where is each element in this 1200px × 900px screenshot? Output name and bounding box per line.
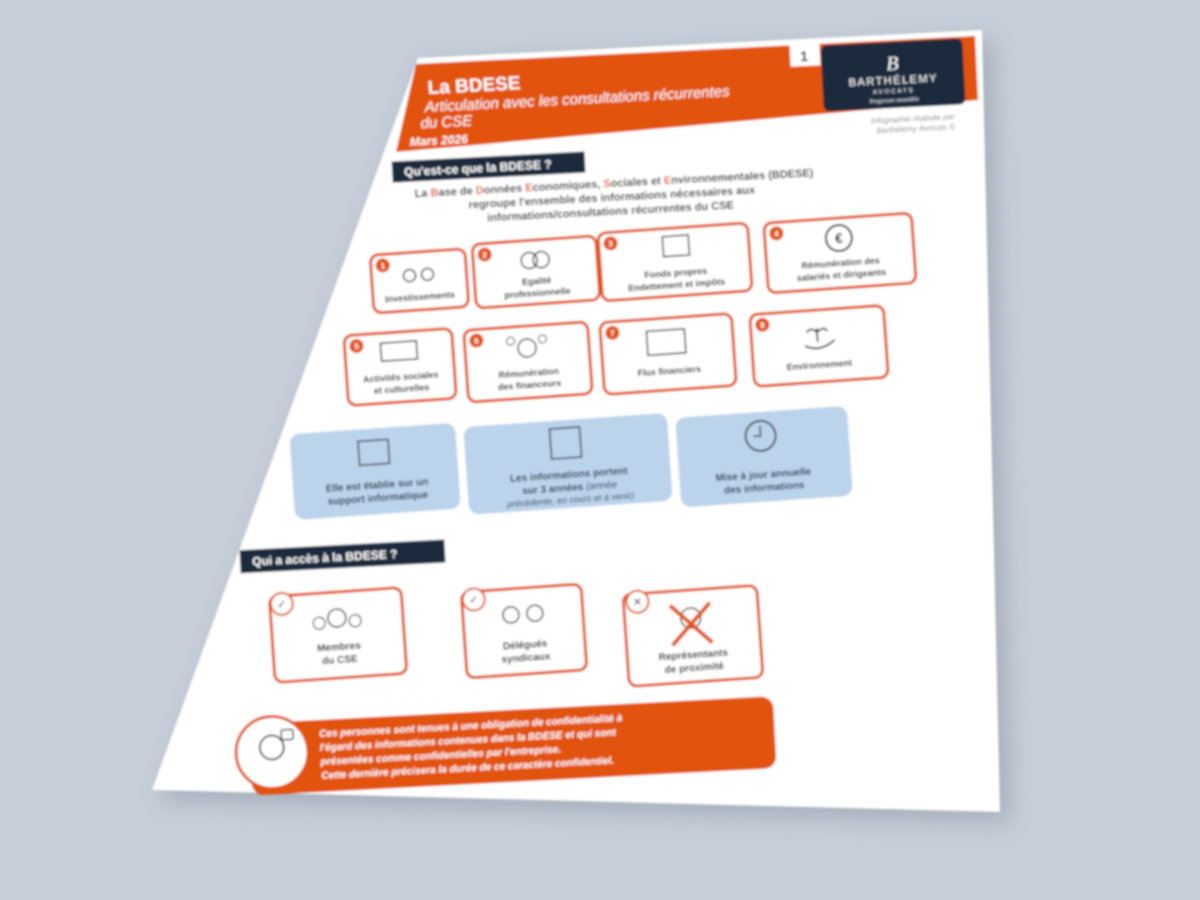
access box: délégués: syndicaux [501, 651, 551, 666]
subtitle: Articulation avec les consultations récurrentes [423, 83, 730, 116]
info box: 3 années [463, 413, 673, 515]
row1 box4: € [834, 230, 844, 246]
logo [820, 38, 966, 112]
row2 box6: des financeurs [498, 378, 562, 392]
page shadow [160, 40, 1010, 822]
access box: représentants [623, 582, 763, 686]
row2 box5: et culturelles [374, 382, 430, 396]
row2 box7: 7 [610, 329, 616, 338]
section label: access: Qui a accès à la BDESE ? [252, 547, 398, 569]
row2 box7: Flux financiers [637, 364, 701, 378]
credit: Barthélemy Avocats © [876, 122, 955, 135]
access box: CSE: ✓ [277, 599, 287, 611]
info box: 3 années: précédente, en cours et à venir) [506, 490, 634, 509]
intro text: informations/consultations récurrentes du CSE [487, 200, 734, 224]
row1 box3: 3 [608, 239, 614, 249]
info box: 3 années: sur 3 années (année [522, 479, 618, 497]
row1 box3 [598, 223, 752, 301]
subtitle [419, 83, 731, 132]
row1 box2: Egalité [522, 275, 552, 287]
row2 box6: 6 [474, 336, 479, 346]
row2 box6 [464, 322, 592, 402]
row1 box3: Endettement et impôts [628, 277, 725, 293]
section label: what is [392, 152, 585, 183]
confidentiality callout: Ces personnes sont tenues à une obligation de confidentialité à [319, 713, 623, 740]
row1 box1 [370, 249, 469, 313]
row2 box8 [750, 305, 888, 387]
page number: 1 [800, 48, 808, 64]
logo: BARTHÉLEMY [848, 72, 938, 89]
info box: support informatique: Elle est établie sur un [325, 477, 429, 495]
subtitle: du CSE [420, 113, 474, 132]
confidentiality callout: présentées comme confidentielles par l'entreprise. [319, 744, 561, 768]
access box: délégués: Délégués [503, 638, 548, 652]
title: La BDESE [427, 73, 521, 99]
intro text: La Base de Données Economiques, Sociales et Environnementales (BDESE) [414, 167, 814, 200]
access box: représentants: Représentants [658, 648, 729, 663]
header band [396, 36, 978, 152]
info box: mise à jour: Mise à jour annuelle [715, 466, 812, 484]
row1 box4: Rémunération des [801, 255, 880, 271]
access box: délégués: ✓ [469, 594, 479, 607]
row2 box5: Activités sociales [363, 369, 439, 385]
access box: CSE [269, 585, 407, 682]
intro text [414, 167, 816, 228]
row2 box5: 5 [354, 342, 360, 351]
confidentiality callout: l'égard des informations contenues dans la BDESE et qui sont [320, 727, 617, 754]
section label: access [240, 540, 445, 573]
info box: mise à jour: des informations [724, 480, 805, 497]
access box: représentants: ✕ [633, 596, 643, 609]
access box: CSE: Membres [317, 640, 362, 654]
row2 box5 [344, 328, 456, 406]
row1 box4 [764, 213, 916, 293]
date: Mars 2026 [409, 132, 468, 149]
info box: mise à jour [675, 406, 853, 508]
section label: what is: Qu'est-ce que la BDESE ? [404, 157, 552, 179]
intro text: regroupe l'ensemble des informations nécessaires aux [468, 184, 756, 211]
row2 box7 [600, 313, 736, 395]
row1 box2 [472, 236, 600, 308]
info box: support informatique: support informatique [327, 490, 429, 508]
logo: B [886, 53, 899, 75]
row1 box1: Investissements [385, 289, 455, 304]
info box: support informatique [289, 423, 461, 520]
row1 box4: 4 [774, 229, 780, 239]
access box: CSE: du CSE [322, 654, 358, 667]
logo: Progresser ensemble [869, 97, 920, 105]
row2 box8: 8 [760, 321, 766, 330]
row1 box3: Fonds propres [644, 266, 708, 280]
row1 box1: 1 [380, 261, 386, 271]
row2 box8: Environnement [786, 358, 852, 372]
row1 box2: professionnelle [504, 286, 571, 300]
logo: AVOCATS [873, 88, 915, 96]
credit: Infographie réalisée par [870, 112, 955, 126]
confidentiality callout: Cette dernière précisera la durée de ce caractère confidentiel. [321, 756, 614, 782]
document page [152, 30, 1000, 812]
row2 box6: Rémunération [498, 366, 559, 380]
access box: représentants: de proximité [664, 661, 725, 676]
row1 box4: salariés et dirigeants [796, 267, 886, 283]
access box: délégués [461, 581, 587, 678]
row1 box2: 2 [482, 250, 488, 260]
credit [870, 112, 956, 136]
confidentiality callout [234, 690, 777, 796]
info box: 3 années: Les informations portent [510, 466, 629, 485]
page number [789, 43, 821, 67]
